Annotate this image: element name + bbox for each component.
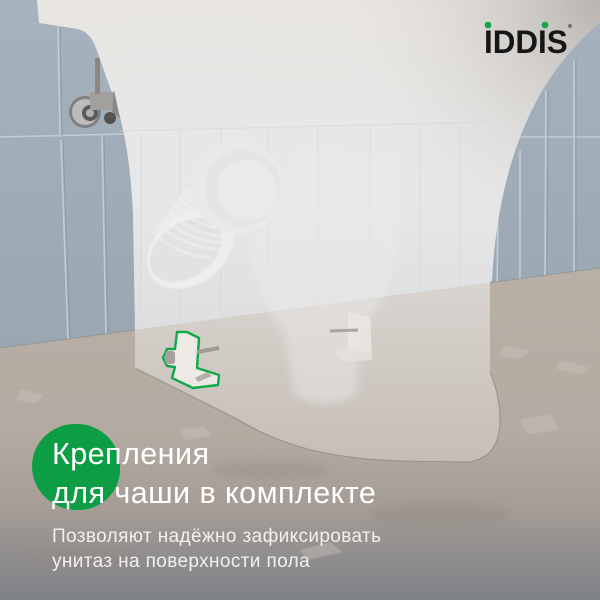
description: унитаз на поверхности пола [52,551,310,572]
heading [52,437,376,510]
logo wordmark: IDDIS [484,24,568,60]
corrugated drain pipe [132,140,285,305]
description [52,526,381,572]
green accent circle [32,424,120,510]
right mounting bracket, faint [330,312,372,362]
toilet bowl [37,0,600,330]
heading: Крепления [52,437,209,471]
floor area seen through the bowl [135,283,500,462]
floor [0,268,600,600]
description: Позволяют надёжно зафиксировать [52,526,381,547]
wall [0,0,600,350]
chrome angle valve [69,58,120,128]
heading: для чаши в комплекте [52,476,376,510]
faint tiles seen through the bowl [120,122,495,328]
green-outlined left mounting bracket [163,332,219,388]
internal trap and outlet [250,150,398,404]
